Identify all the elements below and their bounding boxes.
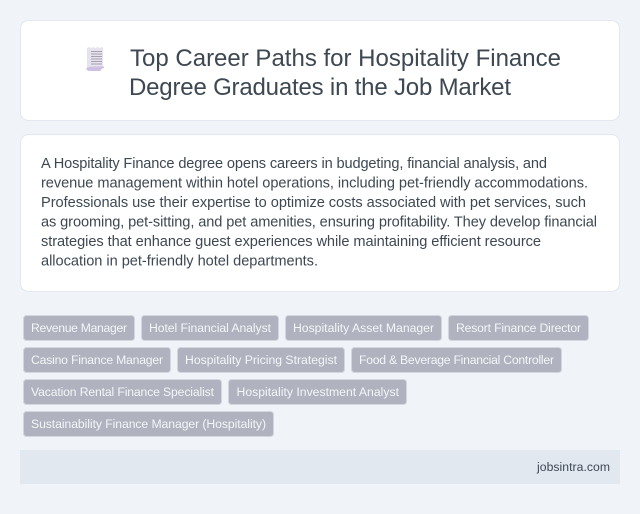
text block: description: strategies that enhance guest experiences while maintaining efficient resource — [41, 234, 541, 250]
tag — [178, 348, 344, 372]
tag — [352, 348, 562, 372]
tag — [24, 348, 170, 372]
tag: Revenue Manager — [31, 321, 127, 335]
tag: Hospitality Pricing Strategist — [185, 353, 338, 367]
tag: Sustainability Finance Manager (Hospitality) — [31, 417, 266, 431]
text block: description: allocation in pet-friendly hotel departments. — [41, 254, 318, 270]
tag — [228, 380, 406, 404]
tag: Hospitality Investment Analyst — [236, 385, 400, 399]
tag: Resort Finance Director — [456, 321, 581, 335]
tag: Vacation Rental Finance Specialist — [31, 385, 215, 399]
footer — [20, 450, 620, 484]
text block: description: Professionals use their expertise to optimize costs associated with pet services, such — [41, 195, 586, 211]
tag — [24, 412, 274, 436]
text block: description: A Hospitality Finance degree opens careers in budgeting, financial analysis, and — [41, 156, 547, 172]
title — [129, 45, 561, 101]
text block: description — [41, 156, 597, 270]
panel: header — [20, 20, 620, 120]
title: Degree Graduates in the Job Market — [129, 74, 511, 101]
tags: career paths — [24, 316, 588, 436]
title: Top Career Paths for Hospitality Finance — [130, 45, 561, 72]
text block: description: revenue management within hotel operations, including pet-friendly accommodations. — [41, 176, 588, 192]
tag: Casino Finance Manager — [31, 353, 163, 367]
tag: Hotel Financial Analyst — [149, 321, 272, 335]
icon: document scroll — [86, 47, 104, 71]
footer text: jobsintra.com — [536, 460, 610, 474]
text block: description: as grooming, pet-sitting, and pet amenities, ensuring profitability. They develop financial — [41, 214, 597, 230]
tag: Food & Beverage Financial Controller — [359, 353, 554, 367]
tag — [24, 380, 222, 404]
tag — [142, 316, 278, 340]
tag: Hospitality Asset Manager — [293, 321, 434, 335]
tag — [448, 316, 588, 340]
panel: description — [20, 134, 620, 292]
tag — [24, 316, 134, 340]
tag — [286, 316, 442, 340]
